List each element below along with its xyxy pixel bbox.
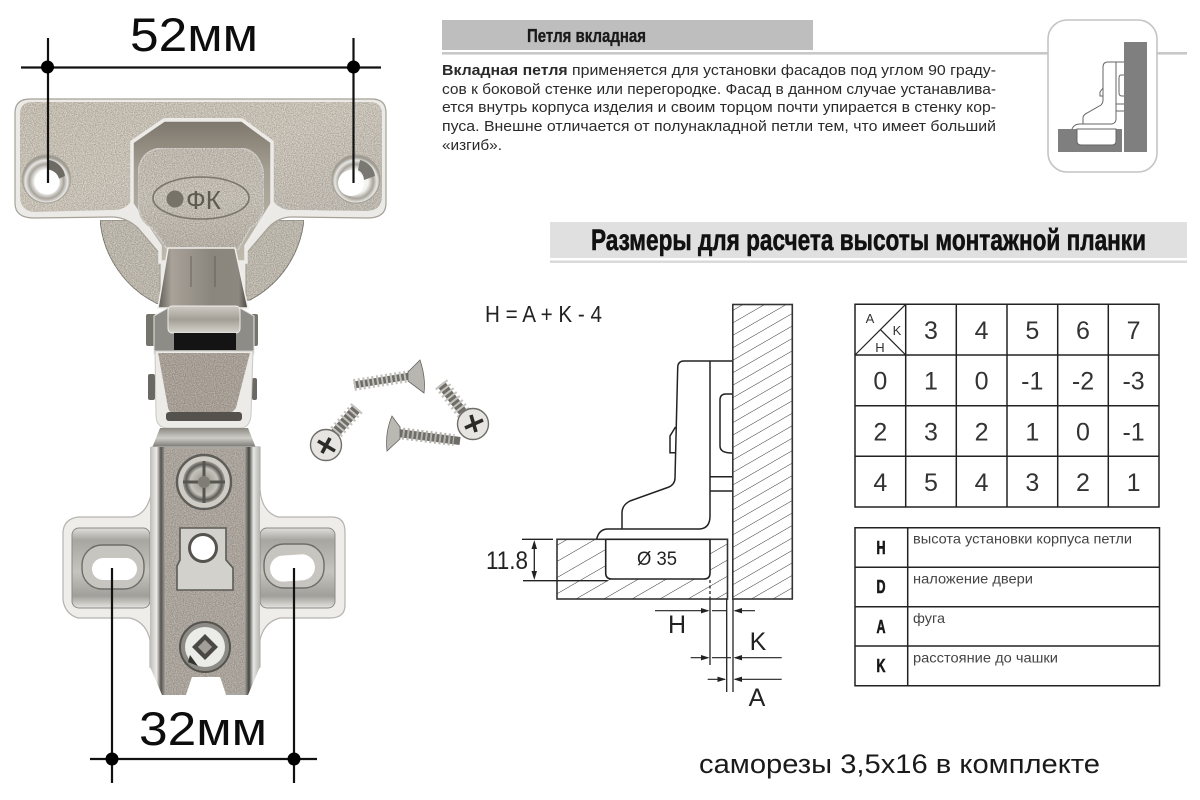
- dimension: 32 mm: [90, 568, 317, 783]
- table numbers: -1: [1122, 418, 1145, 446]
- table numbers: 6: [1076, 317, 1090, 345]
- hinge arm: [148, 351, 257, 448]
- table numbers: 0: [873, 368, 887, 396]
- dimension: H, K, A: K: [750, 628, 767, 656]
- caption: screws included: саморезы 3,5х16 в комплекте: [699, 749, 1100, 779]
- screws set: [310, 360, 488, 460]
- table corner cell: A: [866, 311, 875, 326]
- hinge strap: [158, 248, 248, 308]
- dimension: H, K, A: [655, 599, 782, 712]
- cup bore: [606, 539, 710, 579]
- dimension: H, K, A: A: [749, 684, 766, 712]
- screw: flat head top: [354, 360, 424, 393]
- hinge mounting plate: [15, 99, 386, 300]
- text block: description: Вкладная петля применяется для установки фасадов под углом 90 граду-: [442, 62, 996, 79]
- table: legend: A: [876, 617, 886, 637]
- table numbers: 1: [924, 368, 938, 396]
- wall section: [733, 304, 792, 599]
- hinge outline: [597, 361, 732, 539]
- technical drawing: hinge section: [486, 304, 792, 712]
- text block: description: пуса. Внешне отличается от полунакладной петли тем, что имеет больший: [442, 118, 996, 135]
- table numbers: [873, 317, 1145, 497]
- screw: flat head bottom: [387, 416, 460, 451]
- table numbers: 2: [1076, 469, 1090, 497]
- text block: description: ется внутрь корпуса изделия и своим торцом почти упирается в стенку кор-: [442, 99, 996, 116]
- hinge knuckle: [146, 306, 258, 354]
- formula: H = A + K - 4: [485, 301, 602, 327]
- mounting hole right: [332, 155, 380, 203]
- table numbers: 4: [975, 469, 989, 497]
- table corner cell: K: [893, 323, 902, 338]
- table numbers: 2: [975, 418, 989, 446]
- dimension: 32 mm: 32мм: [139, 702, 267, 755]
- mounting base plate: [63, 447, 345, 695]
- table: legend: H: [876, 538, 886, 558]
- dimension: 11.8: 11.8: [486, 547, 528, 575]
- mounting hole left: [22, 155, 70, 203]
- table numbers: -3: [1122, 368, 1145, 396]
- screw: pan head right: [441, 384, 488, 440]
- table: legend: K: [876, 656, 886, 676]
- table numbers: 5: [924, 469, 938, 497]
- table numbers: 1: [1025, 418, 1039, 446]
- heading: hinge type bar: [442, 20, 1187, 55]
- door section: [557, 539, 728, 599]
- dimension: H, K, A: H: [668, 611, 686, 639]
- table: legend: высота установки корпуса петли: [913, 531, 1132, 547]
- table: legend: D: [876, 577, 886, 597]
- raised cup with logo: ФК: [186, 185, 221, 215]
- table numbers: 2: [873, 418, 887, 446]
- channel recess: [132, 120, 272, 262]
- text block: description: «изгиб».: [442, 137, 502, 154]
- table: legend: [855, 528, 1160, 686]
- heading: hinge type bar: Петля вкладная: [527, 26, 646, 46]
- dashed axis: [709, 580, 711, 599]
- plate window and hole: [177, 528, 233, 590]
- table numbers: 4: [975, 317, 989, 345]
- table: legend: расстояние до чашки: [913, 650, 1058, 666]
- table: legend: наложение двери: [913, 570, 1033, 586]
- table numbers: 0: [1076, 418, 1090, 446]
- icon: inset hinge diagram: [1048, 20, 1157, 172]
- table numbers: 3: [1025, 469, 1039, 497]
- hinge cup disc: [100, 220, 304, 304]
- table numbers: 5: [1025, 317, 1039, 345]
- text block: description: [442, 62, 996, 154]
- dimension: 52 mm: [21, 8, 381, 183]
- table numbers: 0: [975, 368, 989, 396]
- table numbers: 3: [924, 418, 938, 446]
- table corner cell: [855, 304, 906, 355]
- table numbers: 3: [924, 317, 938, 345]
- dimension: 11.8: [486, 539, 608, 581]
- table: H values: [855, 304, 1159, 507]
- table numbers: -2: [1072, 368, 1094, 396]
- raised cup with logo: [138, 148, 264, 250]
- text block: description: сов к боковой стенке или перегородке. Фасад в данном случае устанавлива-: [442, 81, 996, 98]
- table numbers: 1: [1127, 469, 1141, 497]
- table numbers: 7: [1127, 317, 1141, 345]
- table numbers: -1: [1021, 368, 1043, 396]
- table: legend: фуга: [913, 610, 945, 626]
- table numbers: 4: [873, 469, 887, 497]
- table corner cell: H: [875, 340, 885, 355]
- photo: concealed hinge: [15, 99, 386, 695]
- label: diameter 35: Ø 35: [637, 549, 677, 570]
- adjustment screw bottom: [180, 622, 230, 672]
- adjustment screw top: [177, 455, 231, 509]
- screw: pan head left: [310, 408, 357, 460]
- dimension: 52 mm: 52мм: [130, 8, 258, 61]
